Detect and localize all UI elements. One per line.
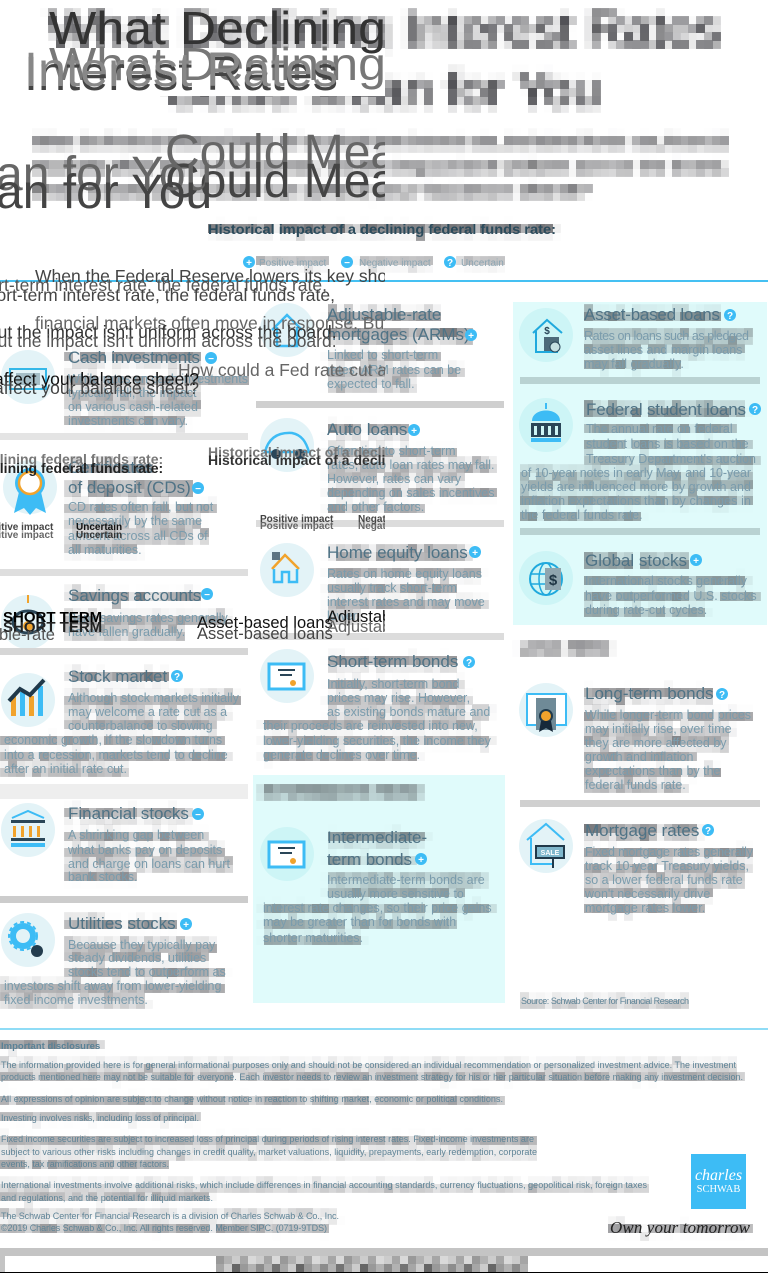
glitched overlay: duplicated chart heading and legend: Uncertain bbox=[76, 522, 122, 533]
disclosure text: The information provided here is for general informational purposes only and should not be considered an individual recommendation or personalized investment advice. The investment bbox=[1, 1060, 736, 1070]
body text: CD rates often fall, but not bbox=[68, 500, 214, 514]
glitched overlay: duplicated chart heading and legend: Historical impact of a declining bbox=[208, 444, 415, 460]
item: long-term bonds bbox=[519, 683, 751, 792]
heading: long term: LONG TERM bbox=[520, 640, 610, 657]
heading: Certificates bbox=[68, 458, 153, 477]
body text bbox=[327, 348, 461, 391]
glitched overlay: duplicated headline: an for You bbox=[0, 166, 212, 219]
disclosure text bbox=[1, 1060, 743, 1233]
body text bbox=[585, 574, 757, 617]
glitched overlay: duplicated intro text bbox=[0, 269, 385, 398]
glitched overlay: duplicated headline: an for You bbox=[0, 148, 212, 201]
body text bbox=[327, 567, 485, 623]
heading: Savings accounts bbox=[68, 586, 201, 605]
body text: Intermediate-term bonds are bbox=[327, 873, 485, 887]
body text: typically fall, the impact bbox=[68, 386, 197, 400]
glitched overlay: duplicated headline: Could Mean bbox=[165, 126, 424, 179]
body text bbox=[4, 938, 226, 1007]
panel: mint background, intermediate term bbox=[253, 775, 505, 1003]
body text: asset lines and margin loans bbox=[584, 343, 742, 357]
body text: the federal funds rate. bbox=[521, 508, 643, 522]
top rule bbox=[0, 280, 768, 282]
body text: all maturities. bbox=[68, 543, 142, 557]
body text: Initially, short-term bond bbox=[327, 677, 460, 691]
tagline: Own your tomorrow bbox=[610, 1218, 751, 1237]
impact badge: ? bbox=[752, 405, 758, 416]
body text: growth and inflation bbox=[585, 750, 693, 764]
mask over left title bbox=[0, 48, 385, 96]
icon: house with arrow bbox=[260, 303, 314, 357]
impact badge: ? bbox=[466, 658, 472, 669]
icon: house for sale bbox=[519, 819, 573, 873]
body text: and other factors. bbox=[327, 500, 424, 514]
body text: may welcome a rate cut as a bbox=[68, 705, 227, 719]
intro paragraph: markets often move in response. But the impact isn't uniform across the board. bbox=[34, 159, 728, 176]
glitched overlay: duplicated section labels: Asset-based loans bbox=[197, 614, 333, 632]
impact badge: + bbox=[468, 331, 474, 342]
body text: during rate-cut cycles. bbox=[585, 603, 707, 617]
disclosure text: Investing involves risks, including loss of principal. bbox=[1, 1113, 199, 1123]
heading line 2: mortgages (ARMs) bbox=[327, 325, 470, 344]
icon: bond certificate bbox=[260, 649, 314, 703]
divider bbox=[256, 633, 504, 640]
body text: counterbalance to slowing bbox=[68, 719, 213, 733]
icon: gears bbox=[1, 913, 55, 967]
icon: bank building bbox=[1, 803, 55, 857]
icon: house for sale: SALE bbox=[541, 850, 560, 857]
glitched overlay: duplicated section labels: Adjustable-rate bbox=[327, 618, 438, 636]
body text: interest rates and may move bbox=[327, 595, 485, 609]
glitched overlay: duplicated intro text: financial markets often move in response. But bbox=[35, 313, 389, 333]
glitched overlay: duplicated chart heading and legend: Positive impact bbox=[260, 514, 334, 525]
body text: inflation expectations than by changes in bbox=[521, 494, 751, 508]
heading: Cash investments bbox=[68, 348, 200, 367]
item: utilities stocks bbox=[1, 913, 226, 1007]
body text bbox=[263, 677, 492, 762]
body text bbox=[4, 691, 240, 776]
body text: after an initial rate cut. bbox=[4, 762, 127, 776]
heading: Mortgage rates bbox=[585, 821, 699, 840]
logo: SCHWAB bbox=[697, 1184, 740, 1195]
body text: investors shift away from lower-yielding bbox=[4, 979, 221, 993]
heading: Asset-based loans bbox=[584, 305, 720, 324]
glitched overlay: duplicated chart heading and legend: Positive impact bbox=[260, 521, 334, 532]
divider bbox=[256, 401, 504, 408]
body text: what banks pay on deposits bbox=[67, 843, 222, 857]
disclosures bbox=[1, 1041, 743, 1233]
body text: lower. bbox=[327, 609, 360, 623]
item: certificates of deposit bbox=[3, 458, 214, 557]
heading: Utilities stocks bbox=[68, 914, 176, 933]
disclosure text: The Schwab Center for Financial Research is a division of Charles Schwab & Co., Inc. bbox=[1, 1211, 339, 1221]
impact badge: − bbox=[195, 484, 201, 495]
body text: rates, auto loan rates may fall. bbox=[327, 458, 494, 472]
bottom rule bbox=[0, 1028, 768, 1030]
item: mortgage rates bbox=[519, 819, 754, 915]
intro paragraph: How could a Fed rate cut affect your balance sheet? bbox=[34, 183, 590, 200]
disclosure text: All expressions of opinion are subject to change without notice in reaction to shifting market, economic or political conditions. bbox=[1, 1094, 503, 1104]
body text: However, rates can vary bbox=[327, 472, 462, 486]
legend: positive impact bbox=[243, 256, 326, 269]
body text: Bank savings rates generally bbox=[68, 611, 229, 625]
body text: Because they typically pay bbox=[68, 938, 216, 952]
body text: While longer-term bond prices bbox=[585, 708, 751, 722]
title bbox=[48, 4, 720, 117]
icon: house bbox=[260, 543, 314, 597]
glitched overlay: duplicated intro text: affect your balance sheet? bbox=[0, 378, 199, 398]
body text: Rates on home equity loans bbox=[327, 567, 482, 581]
icon: bond certificate bbox=[260, 827, 314, 881]
legend: negative impact bbox=[341, 256, 431, 269]
body text: depending on sales incentives bbox=[327, 486, 494, 500]
legend: positive impact: + bbox=[246, 258, 252, 269]
glitched overlay: duplicated headline: Could Mean bbox=[165, 155, 424, 208]
body text: shorter maturities. bbox=[263, 931, 363, 945]
heading: Auto loans bbox=[327, 420, 407, 439]
impact badge: − bbox=[208, 354, 214, 365]
body text: bank stocks. bbox=[68, 870, 137, 884]
legend: uncertain: ? bbox=[447, 258, 453, 269]
divider bbox=[0, 896, 248, 903]
icon: rosette bbox=[3, 460, 57, 515]
divider bbox=[0, 784, 248, 799]
glitched overlay: duplicated section labels bbox=[0, 610, 385, 640]
body text: generate declines over time. bbox=[263, 748, 420, 762]
glitched overlay: duplicated headline: What Declining bbox=[49, 2, 386, 54]
glitched overlay: duplicated headline: What Declining bbox=[49, 38, 386, 90]
icon: house and coins: $ bbox=[544, 326, 550, 337]
body text bbox=[584, 845, 754, 915]
item: intermediate-term bonds bbox=[260, 827, 492, 945]
impact badge bbox=[180, 918, 192, 931]
impact badge: + bbox=[411, 426, 417, 437]
body text: investments can vary. bbox=[68, 414, 188, 428]
logo: charles bbox=[695, 1167, 742, 1184]
icon: rising chart bbox=[1, 673, 55, 727]
body text: Fixed mortgage rates generally bbox=[585, 845, 754, 859]
body text: may initially rise, over time bbox=[585, 722, 732, 736]
body text: Treasury Department's auction bbox=[586, 452, 756, 466]
glitched overlay: duplicated headline bbox=[0, 10, 385, 208]
body text: usually track short-term bbox=[327, 581, 457, 595]
glitched overlay: duplicated section labels: SHORT TERM bbox=[3, 619, 102, 636]
impact badge bbox=[205, 352, 217, 365]
body text: rates, ARM rates can be bbox=[327, 363, 461, 377]
impact badge bbox=[408, 424, 420, 437]
glitched overlay: duplicated section labels: Asset-based loans bbox=[197, 625, 333, 643]
body text bbox=[327, 444, 494, 514]
title: What Declining Interest Rates bbox=[48, 4, 720, 57]
legend bbox=[243, 256, 504, 269]
icon: car bbox=[260, 418, 314, 472]
icon: banknote bbox=[1, 350, 55, 404]
item: federal student loans bbox=[519, 398, 761, 522]
legend: uncertain: Uncertain bbox=[461, 258, 504, 269]
body text: economic growth, if the slowdown turns bbox=[4, 733, 222, 747]
body text: mortgage rates lower. bbox=[585, 901, 705, 915]
body text bbox=[68, 611, 229, 639]
legend: uncertain bbox=[444, 256, 504, 269]
body text: into a recession, markets tend to decline bbox=[4, 748, 228, 762]
glitched overlay: duplicated intro text: How could a Fed rate cut affect bbox=[178, 360, 420, 380]
item: short-term bonds bbox=[260, 649, 492, 762]
body text: International stocks generally bbox=[585, 574, 748, 588]
heading: Intermediate- bbox=[327, 828, 427, 847]
icon: globe with dollar: $ bbox=[549, 572, 558, 589]
glitched overlay: duplicated chart heading and legend: Negative impact bbox=[358, 521, 435, 532]
icon: globe with dollar bbox=[519, 551, 573, 605]
impact badge: ? bbox=[705, 826, 711, 837]
body text: stocks tend to outperform as bbox=[68, 965, 226, 979]
legend: negative impact: Negative impact bbox=[359, 258, 431, 269]
divider bbox=[256, 520, 504, 527]
disclosure text: events, tax ramifications and other factors. bbox=[1, 1159, 169, 1169]
icon: house and coins bbox=[519, 308, 573, 362]
body text: amount across all CDs of bbox=[68, 529, 208, 543]
disclosures heading: Important disclosures bbox=[1, 1041, 100, 1052]
heading: Stock market bbox=[68, 667, 167, 686]
body text: they are more affected by bbox=[585, 736, 727, 750]
impact badge bbox=[201, 588, 213, 601]
body text: track 10-year Treasury yields, bbox=[585, 859, 749, 873]
footer bar bbox=[0, 1248, 768, 1273]
body text: expected to fall. bbox=[327, 377, 415, 391]
impact badge bbox=[724, 309, 736, 322]
source note: Source: Schwab Center for Financial Research bbox=[521, 996, 689, 1006]
disclosure text: Fixed income securities are subject to increased loss of principal during periods of rising interest rates. Fixed-income investments are bbox=[1, 1134, 534, 1144]
body text: Often tied to short-term bbox=[327, 444, 456, 458]
impact badge bbox=[716, 688, 728, 701]
glitched overlay: duplicated section labels: SHORT TERM bbox=[3, 609, 102, 626]
body text: usually more sensitive to bbox=[327, 887, 464, 901]
body text: steady dividends, utilities bbox=[68, 951, 206, 965]
icon: piggy bank bbox=[1, 595, 55, 649]
impact badge: − bbox=[195, 810, 201, 821]
body text: necessarily by the same bbox=[68, 514, 202, 528]
impact badge: + bbox=[472, 548, 478, 559]
heading line 2: of deposit (CDs) bbox=[68, 478, 191, 497]
impact badge bbox=[463, 656, 475, 669]
glitched overlay: duplicated chart heading and legend bbox=[0, 447, 385, 540]
body text: fixed income investments. bbox=[4, 993, 148, 1007]
title: Could Mean for You bbox=[165, 64, 600, 117]
body text: Rates on loans such as pledged bbox=[584, 329, 749, 343]
impact badge: ? bbox=[727, 311, 733, 322]
body text: so a lower federal funds rate bbox=[585, 873, 743, 887]
impact badge bbox=[702, 824, 714, 837]
logo bbox=[691, 1154, 746, 1209]
impact badge: − bbox=[204, 590, 210, 601]
body text bbox=[67, 828, 230, 884]
impact badge bbox=[749, 403, 761, 416]
body text: prices may rise. However, bbox=[327, 691, 470, 705]
heading: intermediate term: INTERMEDIATE TERM bbox=[262, 784, 420, 801]
impact badge bbox=[171, 670, 183, 683]
glitched overlay: duplicated intro text: affect your balance sheet? bbox=[0, 369, 199, 389]
body text bbox=[263, 873, 492, 945]
heading: Global stocks bbox=[585, 551, 687, 570]
disclosure text: and regulations, and the potential for illiquid markets. bbox=[1, 1193, 213, 1203]
body text: federal funds rate. bbox=[585, 778, 686, 792]
impact badge: ? bbox=[719, 690, 725, 701]
body text: their proceeds are reinvested into new, bbox=[263, 719, 478, 733]
body text: as existing bonds mature and bbox=[327, 705, 490, 719]
body text: of 10-year notes in early May, and 10-year bbox=[521, 466, 751, 480]
impact badge: + bbox=[418, 855, 424, 866]
glitched overlay: duplicated chart heading and legend: Historical impact of a declining bbox=[208, 452, 415, 468]
intro paragraph: When the Federal Reserve lowers its key short-term interest rate, the federal funds rate, financial bbox=[34, 134, 728, 151]
body text: lower-yielding securities, the income they bbox=[263, 734, 492, 748]
body text: and charge on loans can hurt bbox=[68, 857, 230, 871]
divider bbox=[0, 648, 248, 655]
impact badge bbox=[415, 853, 427, 866]
divider bbox=[0, 569, 248, 576]
body text: Although stock markets initially bbox=[68, 691, 240, 705]
body text: While rates on cash investments bbox=[68, 372, 248, 386]
chart heading: Historical impact of a declining federal funds rate: bbox=[208, 221, 556, 237]
body text: student loans is based on the bbox=[586, 437, 749, 451]
divider bbox=[520, 377, 760, 384]
body text: Linked to short-term bbox=[327, 348, 438, 362]
item: global stocks bbox=[519, 551, 757, 617]
body text: A shrinking gap between bbox=[68, 828, 204, 842]
body text: may be greater than for bonds with bbox=[263, 915, 456, 929]
impact badge bbox=[192, 808, 204, 821]
heading: Long-term bonds bbox=[585, 684, 714, 703]
heading line 2: term bonds bbox=[327, 850, 412, 869]
item: home equity loans bbox=[260, 543, 485, 623]
impact badge bbox=[192, 482, 204, 495]
intro paragraph bbox=[34, 134, 728, 200]
item: savings accounts bbox=[1, 586, 229, 649]
impact badge: ? bbox=[174, 672, 180, 683]
body text bbox=[521, 422, 756, 522]
disclosure text: products mentioned here may not be suitable for everyone. Each investor needs to review an investment strategy for his or her particular situation before making any investment decision. bbox=[1, 1072, 743, 1082]
item: stock market bbox=[1, 667, 240, 776]
item: financial stocks bbox=[1, 803, 230, 884]
disclosure text: International investments involve additional risks, which include differences in financial accounting standards, currency fluctuations, geopolitical risk, foreign taxes bbox=[1, 1180, 648, 1190]
item: auto loans bbox=[260, 418, 494, 514]
body text: have fallen gradually. bbox=[68, 625, 185, 639]
divider bbox=[0, 433, 248, 440]
glitched overlay: duplicated headline: Interest Rates bbox=[24, 44, 338, 97]
panel: mint background, right column bbox=[513, 302, 767, 625]
icon: capitol bbox=[519, 398, 573, 452]
legend: negative impact: − bbox=[344, 258, 350, 269]
body text: won't necessarily drive bbox=[584, 887, 710, 901]
heading: Federal student loans bbox=[586, 400, 746, 419]
body text: on various cash-related bbox=[68, 400, 198, 414]
impact badge bbox=[690, 554, 702, 567]
impact badge bbox=[465, 329, 477, 342]
body text: The annual rate on federal bbox=[586, 422, 733, 436]
body text: interest rate changes, so their price gains bbox=[263, 901, 492, 915]
item: adjustable-rate mortgages bbox=[260, 303, 477, 391]
body text: expectations than by the bbox=[585, 764, 721, 778]
glitched overlay: duplicated chart heading and legend: Negative impact bbox=[358, 514, 435, 525]
legend: positive impact: Positive impact bbox=[259, 258, 326, 269]
glitched overlay: duplicated chart heading and legend: Uncertain bbox=[76, 530, 122, 541]
body text: may fall gradually. bbox=[584, 357, 684, 371]
glitched overlay: duplicated section labels: Adjustable-rate bbox=[327, 608, 438, 626]
body text bbox=[585, 708, 751, 792]
heading: Financial stocks bbox=[68, 804, 189, 823]
item: cash investments bbox=[1, 348, 248, 428]
divider bbox=[520, 800, 760, 807]
divider bbox=[520, 528, 760, 535]
body text bbox=[68, 372, 248, 428]
body text bbox=[68, 500, 214, 557]
impact badge: + bbox=[183, 920, 189, 931]
body text: yields are influenced more by growth and bbox=[521, 480, 751, 494]
heading: Adjustable-rate bbox=[327, 305, 441, 324]
disclosure text: subject to various other risks including changes in credit quality, market valuations, liquidity, prepayments, early redemption, corporate bbox=[1, 1147, 537, 1157]
icon: bond with seal bbox=[519, 683, 573, 737]
disclosure text: ©2019 Charles Schwab & Co., Inc. All rights reserved. Member SIPC. (0719-9TDS) bbox=[1, 1223, 327, 1233]
item: asset-based loans bbox=[519, 305, 749, 371]
glitched overlay: duplicated intro text: When the Federal Reserve lowers its key short-term bbox=[35, 266, 439, 286]
heading: Home equity loans bbox=[327, 543, 468, 562]
body text bbox=[584, 329, 749, 371]
impact badge bbox=[469, 546, 481, 559]
glitched overlay: duplicated headline: Interest Rates bbox=[24, 48, 338, 101]
body text: have outperformed U.S. stocks bbox=[585, 589, 757, 603]
heading: Short-term bonds bbox=[327, 652, 458, 671]
impact badge: + bbox=[693, 556, 699, 567]
